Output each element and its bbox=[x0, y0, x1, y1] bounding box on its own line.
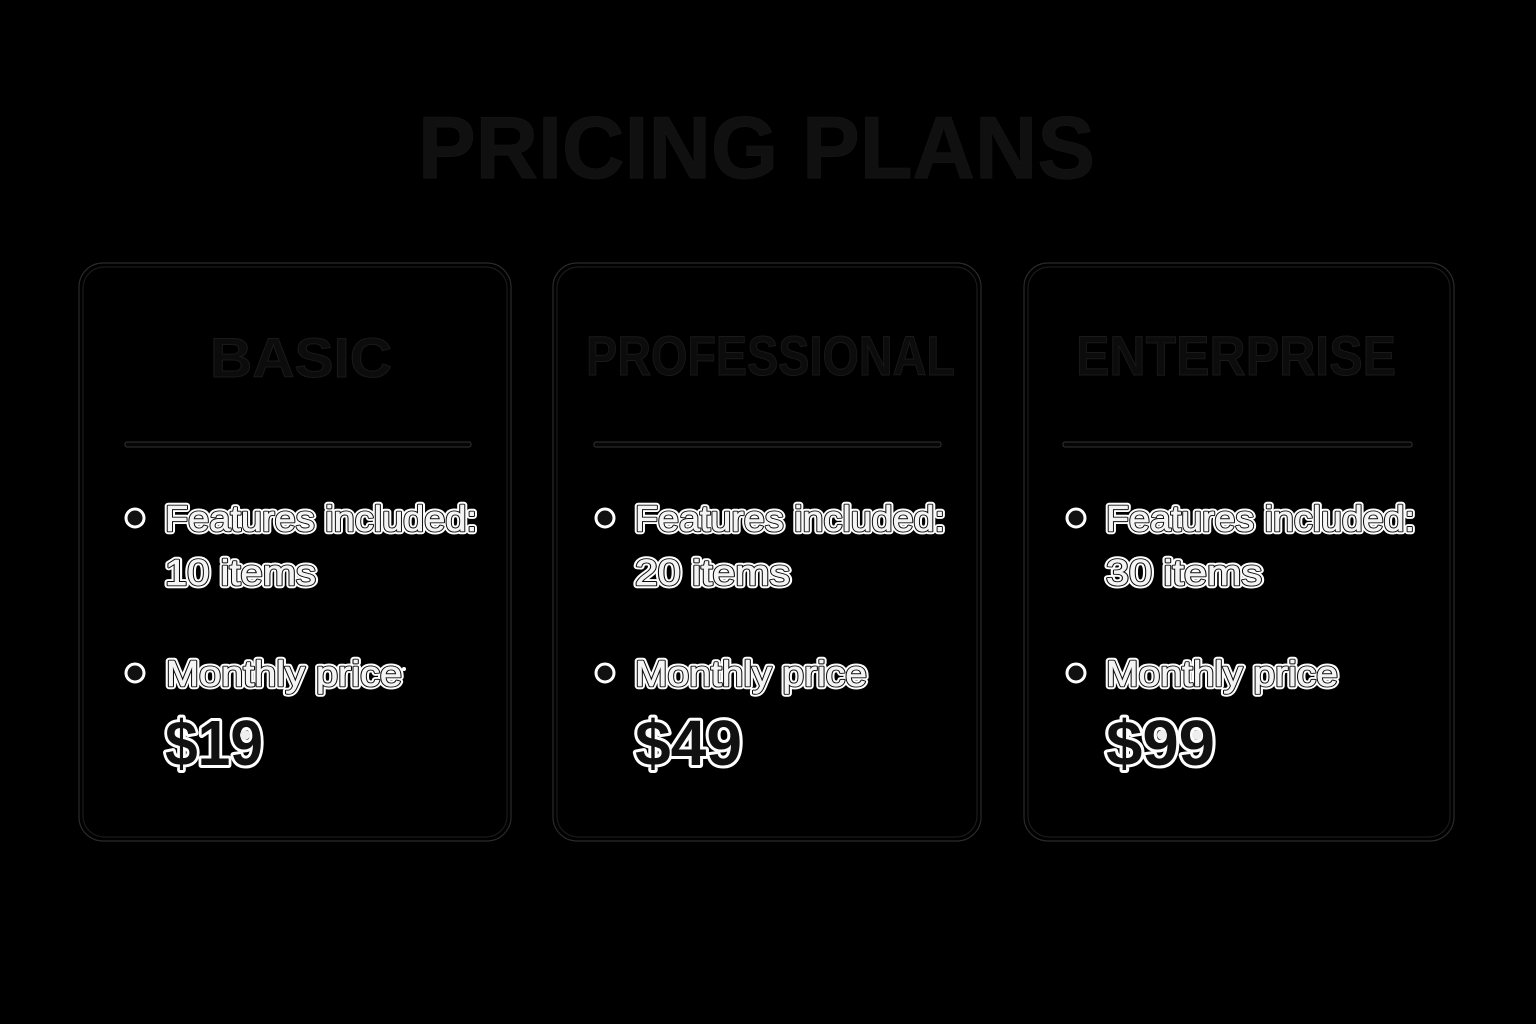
text: monthly price: Monthly price bbox=[1106, 653, 1338, 694]
text: 30 items: 30 items bbox=[1106, 552, 1262, 593]
text: monthly price: Monthly price bbox=[635, 653, 867, 694]
icon: bullet features bbox=[126, 509, 144, 527]
card border bbox=[553, 263, 981, 841]
text: monthly price: Monthly price bbox=[166, 653, 402, 694]
text: features included: Features included: bbox=[635, 498, 945, 539]
heading: professional: PROFESSIONAL bbox=[586, 324, 955, 387]
heading: enterprise: ENTERPRISE bbox=[1076, 324, 1396, 387]
text: monthly price: Monthly price bbox=[166, 653, 402, 694]
text: 30 items: 30 items bbox=[1106, 552, 1262, 593]
icon: bullet price bbox=[1067, 664, 1085, 682]
heading: basic: BASIC bbox=[210, 326, 392, 389]
text: features included: Features included: bbox=[165, 498, 477, 539]
text: 10 items: 10 items bbox=[165, 552, 316, 593]
divider bbox=[594, 442, 941, 447]
text: monthly price: Monthly price bbox=[166, 653, 402, 694]
text: features included: Features included: bbox=[1106, 498, 1415, 539]
title: PRICING PLANS bbox=[418, 98, 1095, 197]
panel: enterprise plan bbox=[1024, 263, 1454, 841]
text: 20 items: 20 items bbox=[635, 552, 790, 593]
text: features included: Features included: bbox=[165, 498, 477, 539]
text: 10 items: 10 items bbox=[165, 552, 316, 593]
text: 10 items: 10 items bbox=[165, 552, 316, 593]
text: features included: Features included: bbox=[165, 498, 477, 539]
text: monthly price: Monthly price bbox=[635, 653, 867, 694]
price: $99: $99 bbox=[1106, 707, 1215, 779]
panel: basic plan bbox=[79, 263, 511, 841]
price: $49: $49 bbox=[635, 707, 742, 779]
text: features included: Features included: bbox=[1106, 498, 1415, 539]
text: monthly price: Monthly price bbox=[1106, 653, 1338, 694]
icon: bullet features bbox=[1067, 509, 1085, 527]
text: 30 items: 30 items bbox=[1106, 552, 1262, 593]
card border bbox=[79, 263, 511, 841]
divider bbox=[1063, 442, 1412, 447]
text: features included: Features included: bbox=[635, 498, 945, 539]
text: monthly price: Monthly price bbox=[635, 653, 867, 694]
card border bbox=[1024, 263, 1454, 841]
text: 20 items: 20 items bbox=[635, 552, 790, 593]
text: features included: Features included: bbox=[1106, 498, 1415, 539]
icon: bullet price bbox=[126, 664, 144, 682]
icon: bullet features bbox=[596, 509, 614, 527]
text: features included: Features included: bbox=[635, 498, 945, 539]
text: monthly price: Monthly price bbox=[1106, 653, 1338, 694]
price: $19: $19 bbox=[165, 707, 263, 779]
icon: bullet price bbox=[596, 664, 614, 682]
text: 20 items: 20 items bbox=[635, 552, 790, 593]
divider bbox=[125, 442, 471, 447]
panel: professional plan bbox=[553, 263, 981, 841]
